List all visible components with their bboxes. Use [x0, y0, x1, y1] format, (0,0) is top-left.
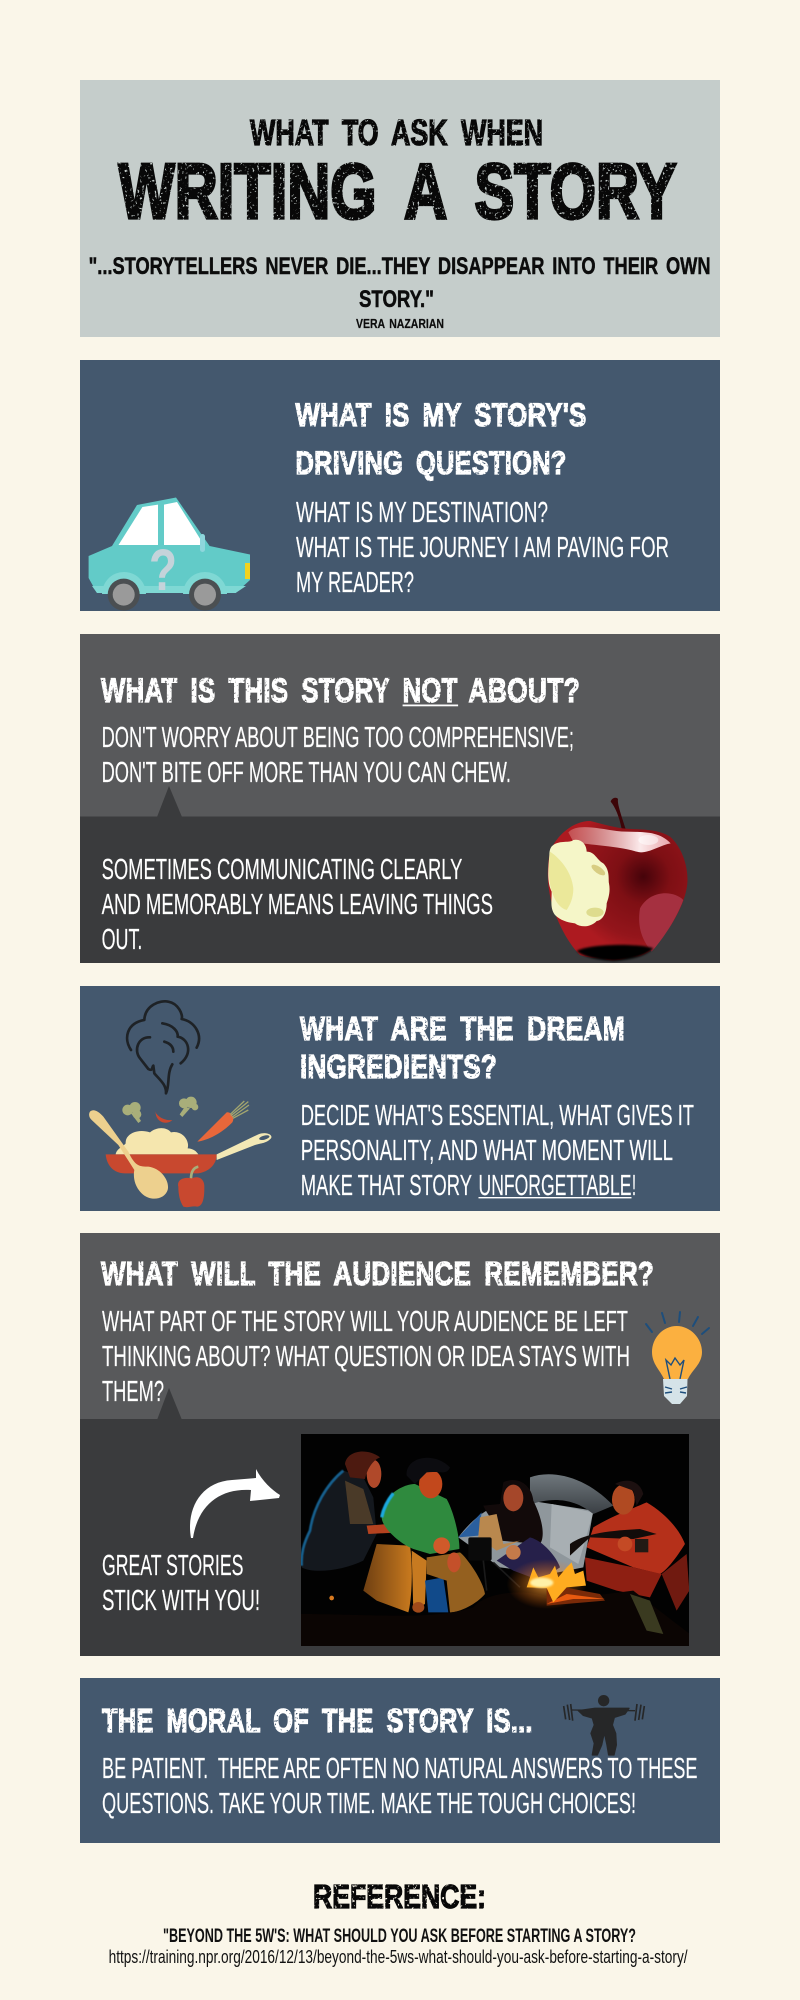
- body text: essentials: [301, 1100, 694, 1202]
- body text: leaving things out: AND MEMORABLY MEANS LEAVING THINGS: [102, 889, 493, 921]
- quote: [89, 253, 711, 313]
- panel: what the story is not about: [80, 634, 720, 963]
- body text: destination: WHAT IS MY DESTINATION?: [296, 497, 548, 529]
- body text: essentials: MAKE THAT STORY: [301, 1170, 472, 1202]
- body text: leaving things out: SOMETIMES COMMUNICATING CLEARLY: [102, 854, 462, 886]
- body text: destination: MY READER?: [296, 567, 414, 599]
- body text: be patient: [102, 1753, 698, 1820]
- heading: driving question: [296, 397, 586, 481]
- panel: dream ingredients: [80, 986, 720, 1211]
- body text: essentials: UNFORGETTABLE: [478, 1170, 632, 1202]
- quote: STORY.": [359, 286, 434, 313]
- fire pit and campfire: [300, 1559, 690, 1646]
- heading: driving question: WHAT IS MY STORY'S: [296, 397, 586, 433]
- panel: moral of the story: [80, 1678, 720, 1843]
- icon: light bulb: [646, 1312, 709, 1404]
- pointer triangle: [157, 786, 182, 817]
- body text: leaving things out: [102, 854, 493, 956]
- panel: what the audience will remember: [80, 1233, 720, 1656]
- lower band: [80, 1419, 720, 1656]
- body text: great stories: [102, 1550, 260, 1617]
- body text: destination: [296, 497, 669, 599]
- body text: great stories: STICK WITH YOU!: [102, 1585, 260, 1617]
- tent: [458, 1474, 613, 1574]
- heading: driving question: DRIVING QUESTION?: [296, 445, 566, 481]
- panel: title header: [80, 80, 720, 337]
- heading: dream ingredients: [300, 1010, 625, 1085]
- reference citation: [109, 1926, 688, 1967]
- heading: not about: NOT: [403, 672, 458, 710]
- icon: curved arrow: [190, 1469, 280, 1538]
- heading: dream ingredients: INGREDIENTS?: [300, 1048, 497, 1085]
- person: woman on left: [301, 1452, 427, 1612]
- heading: audience: WHAT WILL THE AUDIENCE REMEMBER?: [101, 1255, 654, 1292]
- title line one: WHAT TO ASK WHEN: [250, 112, 543, 153]
- body text: what stays: THEM?: [102, 1376, 164, 1408]
- heading: not about: ABOUT?: [468, 672, 580, 710]
- body text: comprehensive: [102, 722, 574, 789]
- body text: what stays: [102, 1306, 630, 1408]
- body text: leaving things out: OUT.: [102, 924, 142, 956]
- quote author: VERA NAZARIAN: [356, 316, 444, 331]
- heading: dream ingredients: WHAT ARE THE DREAM: [300, 1010, 625, 1047]
- body text: comprehensive: DON'T BITE OFF MORE THAN YOU CAN CHEW.: [102, 757, 511, 789]
- lower band: [80, 816, 720, 963]
- pointer triangle: [157, 1388, 182, 1420]
- icon: weightlifter: [564, 1695, 644, 1755]
- infographic canvas: [80, 80, 720, 1967]
- body text: great stories: GREAT STORIES: [102, 1550, 243, 1582]
- photo: friends around a campfire: [300, 1434, 690, 1646]
- person: woman by the tent: [468, 1480, 560, 1591]
- person: man in green: [382, 1458, 485, 1613]
- icon: bitten apple: [548, 798, 688, 961]
- reference heading: REFERENCE:: [313, 1878, 486, 1915]
- panel: driving question: [80, 360, 720, 611]
- icon: car with question mark: [89, 498, 250, 611]
- person: man in red: [570, 1481, 689, 1611]
- heading: not about: WHAT IS THIS STORY: [101, 672, 390, 710]
- icon: car with question mark: ?: [149, 538, 177, 603]
- body text: essentials: !: [632, 1170, 636, 1202]
- heading: moral: THE MORAL OF THE STORY IS...: [102, 1702, 533, 1739]
- icon: cooking pan with ingredients and steam: [89, 1001, 271, 1207]
